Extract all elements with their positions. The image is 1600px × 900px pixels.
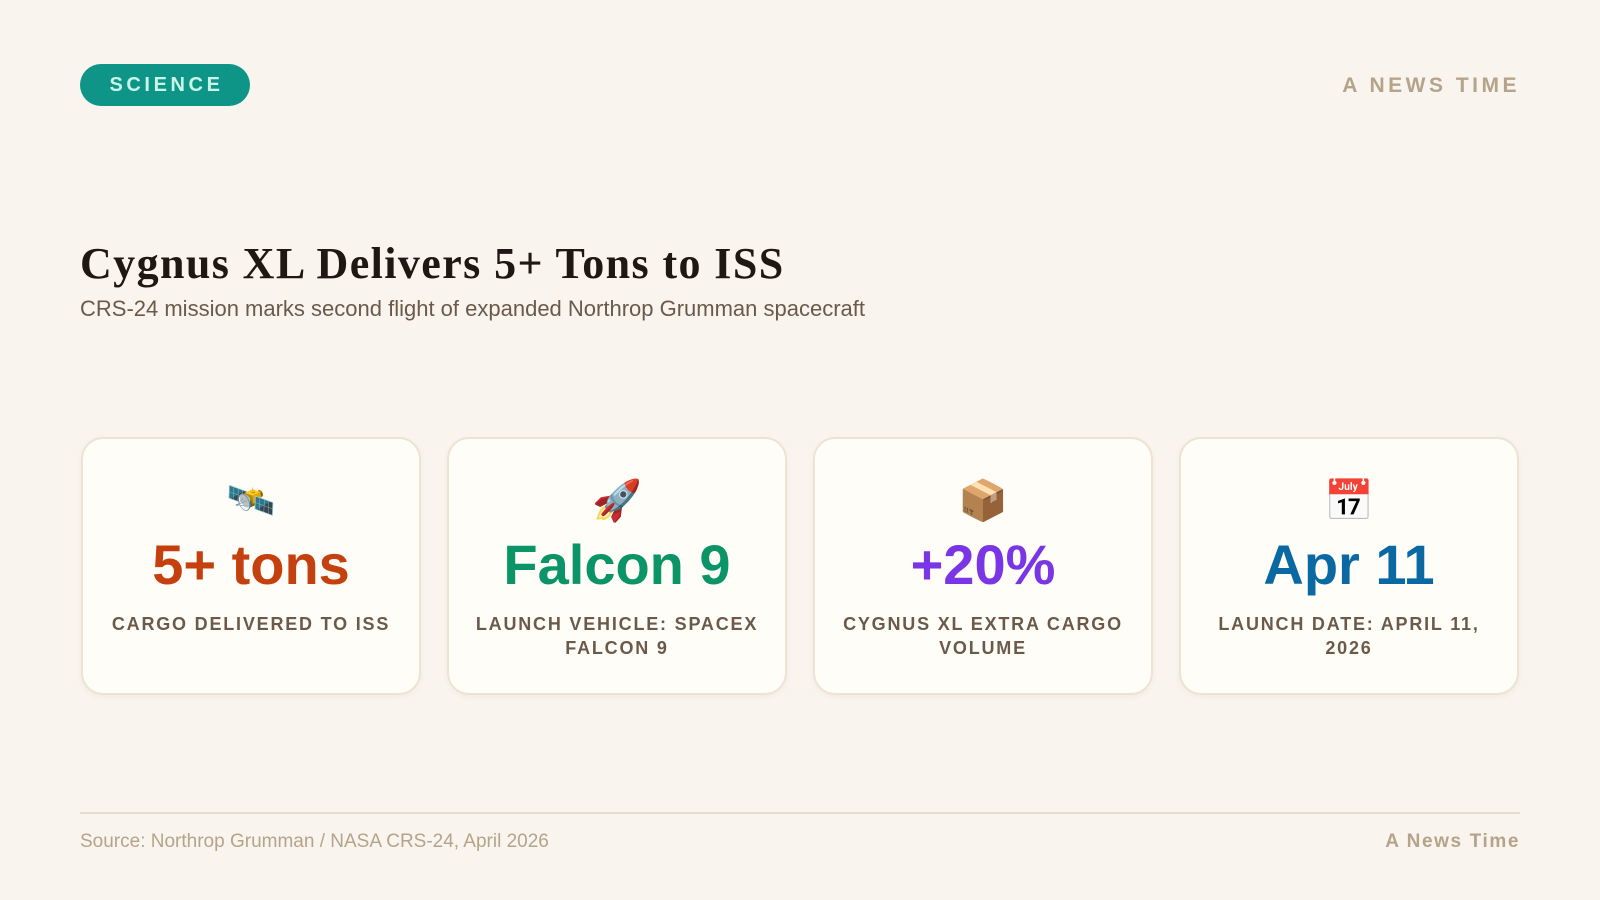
card: launch vehicle: [447, 437, 787, 695]
label: vehicle: LAUNCH VEHICLE: SPACEX FALCON 9: [476, 614, 758, 658]
label: date: LAUNCH DATE: APRIL 11, 2026: [1218, 614, 1480, 658]
value: vehicle: Falcon 9: [503, 533, 731, 596]
icon: calendar: 📅: [1324, 477, 1374, 524]
title: Cygnus XL Delivers 5+ Tons to ISS: [80, 239, 785, 288]
source footer: Source: Northrop Grumman / NASA CRS-24, April 2026: [80, 831, 549, 852]
icon: rocket: 🚀: [592, 477, 642, 524]
category pill: SCIENCE: [109, 74, 224, 96]
icon: package: 📦: [958, 477, 1008, 524]
footer brand: A News Time: [1385, 831, 1520, 852]
card: launch date: [1179, 437, 1519, 695]
card: cargo: [81, 437, 421, 695]
value: volume: +20%: [911, 533, 1055, 596]
label: volume: CYGNUS XL EXTRA CARGO VOLUME: [843, 614, 1123, 658]
subtitle: CRS-24 mission marks second flight of expanded Northrop Grumman spacecraft: [80, 296, 865, 321]
value: cargo: 5+ tons: [152, 533, 350, 596]
label: cargo: CARGO DELIVERED TO ISS: [112, 614, 390, 634]
value: date: Apr 11: [1263, 533, 1435, 596]
icon: satellite: 🛰️: [226, 477, 276, 524]
card: volume: [813, 437, 1153, 695]
brand: A NEWS TIME: [1342, 74, 1520, 97]
category pill: [80, 64, 250, 106]
